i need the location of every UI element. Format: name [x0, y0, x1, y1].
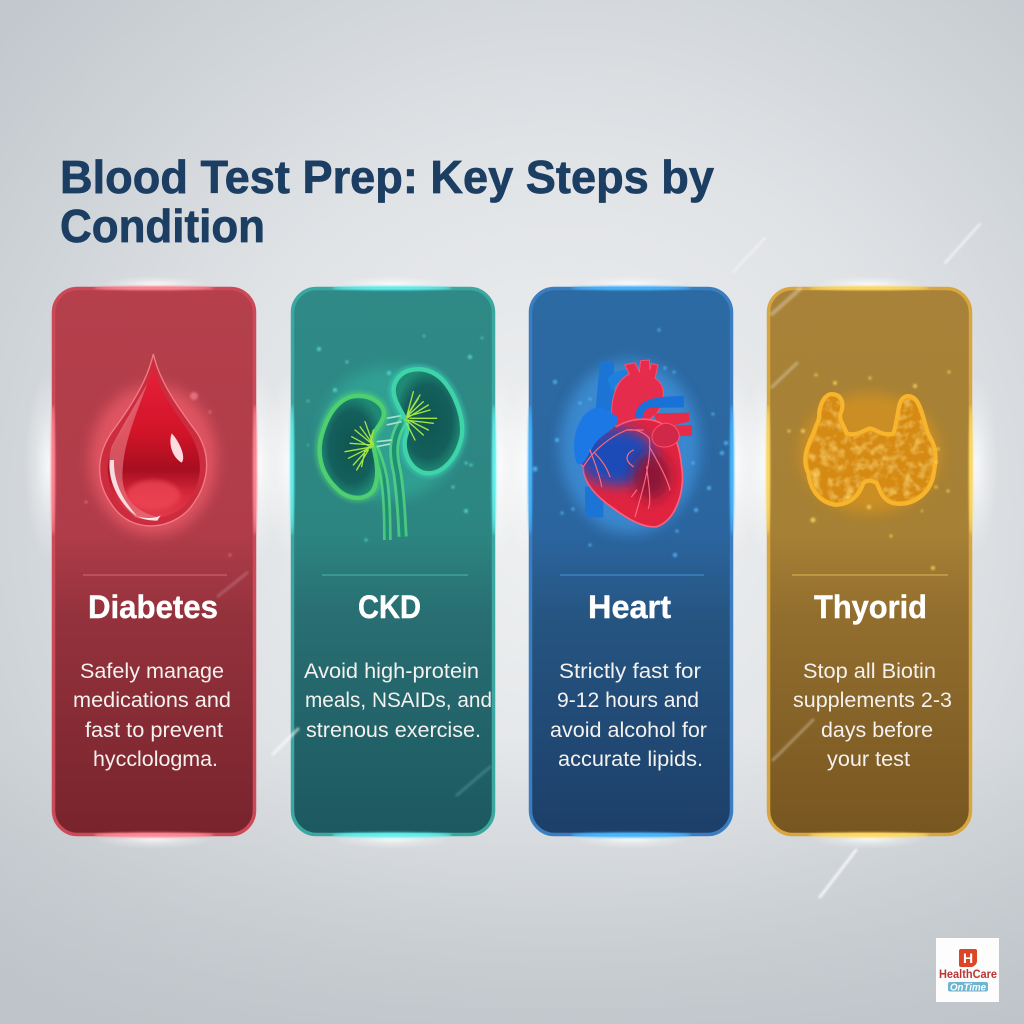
panel: heart	[502, 276, 760, 849]
card	[530, 288, 732, 834]
icon: thyroid	[800, 393, 940, 513]
outer glow	[502, 276, 760, 849]
icon: blood drop	[90, 354, 217, 535]
panel: diabetes	[24, 276, 284, 849]
body text: meals, NSAIDs, and	[305, 689, 492, 712]
outer glow	[740, 276, 999, 849]
heading: Heart	[588, 589, 671, 625]
divider	[792, 574, 948, 576]
body text: days before	[821, 719, 933, 742]
body text	[793, 660, 952, 771]
body text: avoid alcohol for	[550, 719, 707, 742]
outer glow	[264, 276, 522, 849]
divider	[322, 574, 468, 576]
body text: medications and	[73, 689, 231, 712]
card	[54, 288, 254, 834]
streak	[217, 572, 248, 597]
border highlights	[528, 286, 734, 838]
border highlights	[51, 286, 257, 838]
heading: CKD	[358, 589, 421, 625]
divider	[83, 574, 227, 576]
body text: your test	[827, 748, 910, 771]
title: Condition	[60, 200, 265, 252]
card	[768, 288, 970, 834]
title: Blood Test Prep: Key Steps by	[60, 151, 714, 203]
outer glow	[24, 276, 284, 849]
streaks	[772, 289, 813, 760]
title	[60, 151, 714, 252]
icon: heart	[560, 360, 700, 533]
border highlights	[766, 286, 973, 838]
body text: 9-12 hours and	[557, 689, 699, 712]
background light streaks	[733, 224, 980, 897]
body text: Avoid high-protein	[304, 660, 479, 683]
panel: CKD	[264, 276, 522, 849]
logo icon: H	[963, 950, 973, 966]
body text: fast to prevent	[85, 719, 223, 742]
border highlights	[290, 286, 496, 838]
card	[292, 288, 494, 834]
icon: kidneys	[320, 367, 462, 540]
particles	[788, 370, 950, 570]
heading: Thyorid	[814, 589, 927, 625]
heading: Diabetes	[88, 589, 218, 625]
body text: accurate lipids.	[558, 748, 703, 771]
body text: Safely manage	[80, 660, 224, 683]
body text: Strictly fast for	[559, 660, 701, 683]
streak	[273, 729, 490, 795]
body text: strenous exercise.	[306, 719, 481, 742]
body text: supplements 2-3	[793, 689, 952, 712]
panel: thyroid	[740, 276, 999, 849]
logo wordmark: HealthCare	[939, 969, 997, 981]
body text	[73, 660, 231, 771]
particles	[84, 392, 232, 556]
particles	[532, 328, 728, 557]
logo	[936, 938, 999, 1002]
body text: hycclologma.	[93, 748, 218, 771]
particles	[307, 335, 483, 542]
body text	[550, 660, 707, 771]
divider	[560, 574, 704, 576]
logo tagline: OnTime	[950, 982, 986, 994]
body text	[304, 660, 492, 742]
body text: Stop all Biotin	[803, 660, 936, 683]
